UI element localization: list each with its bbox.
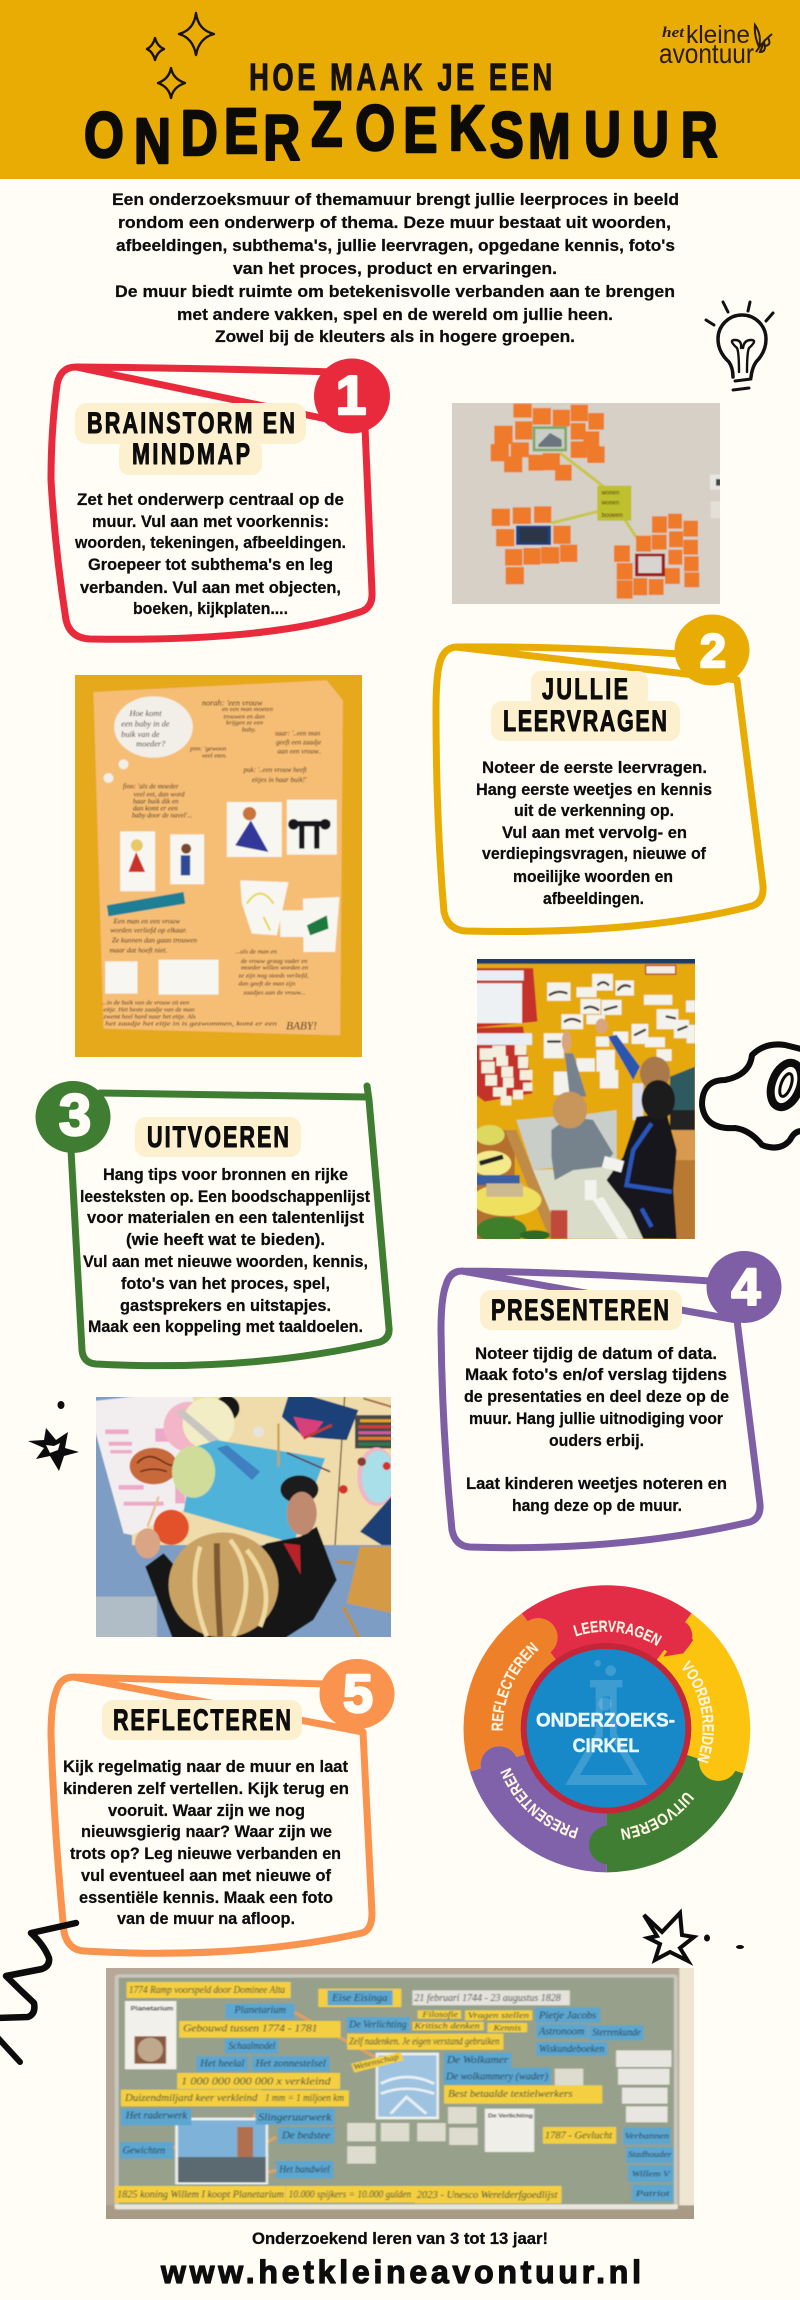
badge 2: 2: [700, 624, 726, 677]
photo: finished wall about planetarium: De wolkammery (wader): [445, 2071, 548, 2082]
photo: finished wall about planetarium: Slingeruurwerk: [258, 2112, 333, 2123]
photo: poster hoe komt een baby in de buik: moeder?: [136, 739, 166, 748]
intro text block: Zowel bij de kleuters als in hogere groepen.: [215, 327, 575, 346]
photo: poster hoe komt een baby in de buik: Hoe komt: [128, 709, 162, 718]
photo: finished wall about planetarium: Kritisch denken: [413, 2021, 480, 2030]
segment: leervragen: [522, 1585, 692, 1728]
heading pill: PRESENTEREN: [491, 1292, 669, 1327]
panel: 5 reflecteren: [51, 1659, 394, 1953]
photo: finished wall about planetarium: De Wolkamer: [446, 2055, 509, 2066]
photo: finished wall about planetarium: 1 mm = 1 miljoen km: [265, 2093, 344, 2104]
photo: finished wall about planetarium: [106, 1968, 694, 2219]
icon: light bulb: [706, 302, 773, 390]
intro text block: rondom een onderwerp of thema. Deze muur bestaat uit woorden,: [118, 213, 671, 232]
body text: essentiële kennis. Maak een foto: [79, 1888, 333, 1907]
body text: uit de verkenning op.: [514, 801, 674, 820]
photo: finished wall about planetarium: Best betaalde textielwerkers: [448, 2089, 573, 2100]
photo: mindmap on wall: bouwen: [602, 513, 623, 519]
photo: finished wall about planetarium: Patriot: [635, 2190, 670, 2199]
heading pill: LEERVRAGEN: [503, 703, 667, 738]
ring labels: LEERVRAGEN: [573, 1620, 662, 1646]
doodle: squiggle: [0, 1923, 76, 2062]
photo: finished wall about planetarium: Het bandwiel: [278, 2164, 330, 2175]
heading pill: MINDMAP: [132, 436, 250, 471]
body text: Noteer tijdig de datum of data.: [475, 1344, 717, 1363]
photo: finished wall about planetarium: 1825 koning Willem I koopt Planetarium: [117, 2189, 284, 2200]
heading: hoe maak je een: HOE MAAK JE EEN: [249, 57, 552, 99]
frame: [441, 1271, 760, 1548]
body text: woorden, tekeningen, afbeeldingen.: [74, 533, 346, 552]
heading pill: [75, 403, 306, 475]
photo: mindmap on wall: wonen: [601, 491, 619, 497]
badge 4: 4: [732, 1259, 761, 1317]
intro text block: met andere vakken, spel en de wereld om jullie heen.: [177, 305, 613, 324]
segment: uitvoeren: [606, 1728, 743, 1872]
doodle: burst star and dots: [644, 1913, 744, 1961]
photo: finished wall about planetarium: Wiskundeboeken: [539, 2044, 605, 2055]
photo: finished wall about planetarium: Planetarium: [131, 2006, 173, 2012]
body text: nieuwsgierig naar? Waar zijn we: [81, 1822, 332, 1841]
body text: Maak een koppeling met taaldoelen.: [88, 1317, 363, 1336]
body text: [464, 1344, 729, 1515]
logo: het kleine avontuur: kleine: [686, 21, 750, 49]
photo: poster hoe komt een baby in de buik: een baby in de: [121, 719, 170, 728]
photo: poster hoe komt een baby in de buik: ...als de man en: [235, 949, 278, 956]
photo: finished wall about planetarium: 21 februari 1744 - 23 augustus 1828: [414, 1993, 561, 2004]
heading pill: REFLECTEREN: [113, 1702, 291, 1737]
photo: finished wall about planetarium: 1774 Ramp voorspeld door Dominee Alta: [129, 1985, 286, 1996]
photo: poster hoe komt een baby in de buik: baby door de navel'...: [132, 812, 193, 820]
body text: verdiepingsvragen, nieuwe of: [482, 844, 706, 863]
centre label: [536, 1711, 675, 1757]
photo: poster hoe komt een baby in de buik: norah: 'een vrouw: [202, 699, 263, 708]
photo: poster hoe komt een baby in de buik: dan komt er een: [133, 804, 178, 812]
intro text block: [112, 190, 679, 346]
photo: poster hoe komt een baby in de buik: worden verliefd op elkaar.: [110, 926, 187, 935]
heading pill: BRAINSTORM EN: [87, 405, 295, 440]
body text: Kijk regelmatig naar de muur en laat: [63, 1757, 348, 1776]
segment: presenteren: [470, 1728, 607, 1872]
photo: poster hoe komt een baby in de buik: de vrouw graag vader en: [241, 958, 308, 965]
photo: finished wall about planetarium: Vragen stellen: [468, 2011, 530, 2020]
photo: finished wall about planetarium: Stadhouder: [628, 2151, 672, 2160]
body text: Noteer de eerste leervragen.: [482, 758, 707, 777]
photo: poster hoe komt een baby in de buik: moeder willen worden en: [241, 965, 309, 972]
photo: finished wall about planetarium: Verbannen: [625, 2132, 669, 2141]
badge 1: 1: [336, 364, 366, 426]
photo: poster hoe komt een baby in de buik: baby.: [242, 727, 256, 734]
badge 4: [706, 1251, 782, 1323]
photo: finished wall about planetarium: Schaalmodel: [229, 2041, 275, 2052]
photo: poster hoe komt een baby in de buik: haar buik dik en: [133, 798, 179, 806]
body text: [74, 490, 346, 618]
doodle: cloud with eye: [702, 1044, 800, 1148]
photo: poster hoe komt een baby in de buik: maar dat hoeft niet.: [110, 946, 167, 955]
body text: de presentaties en deel deze op de: [464, 1387, 729, 1406]
centre label: CIRKEL: [573, 1736, 640, 1757]
body text: moeilijke woorden en: [513, 867, 673, 886]
photo: poster hoe komt een baby in de buik: en een man moeten: [222, 706, 274, 713]
photo: poster hoe komt een baby in de buik: het zaadje het eitje in is gezwommen, komt er een: [105, 1021, 278, 1028]
photo: finished wall about planetarium: Astronoom: [538, 2026, 585, 2037]
segment: voorbereiden: [606, 1613, 750, 1773]
photo: poster hoe komt een baby in de buik: pim: 'gewoon: [189, 745, 227, 752]
badge 2: [674, 614, 750, 686]
ring labels: PRESENTEREN: [500, 1768, 578, 1839]
body text: boeken, kijkplaten....: [133, 599, 288, 618]
photo: poster hoe komt een baby in de buik: finn: 'als de moeder: [123, 783, 179, 791]
segment: reflecteren: [464, 1613, 606, 1772]
photo: finished wall about planetarium: De Verlichting: [348, 2019, 407, 2030]
panel: 1 brainstorm en mindmap: [51, 358, 390, 639]
frame: [51, 367, 372, 639]
header band: [0, 0, 800, 179]
photo: finished wall about planetarium: De bedstee: [281, 2130, 330, 2141]
photo: poster hoe komt een baby in de buik: buik van de: [121, 730, 160, 739]
badge 3: 3: [59, 1083, 91, 1148]
body text: Laat kinderen weetjes noteren en: [466, 1474, 727, 1493]
photo: mindmap on wall: wonen: [601, 501, 619, 507]
body text: verbanden. Vul aan met objecten,: [80, 578, 341, 597]
body text: muur. Vul aan met voorkennis:: [92, 512, 329, 531]
body text: Zet het onderwerp centraal op de: [77, 490, 344, 509]
photo: poster hoe komt een baby in de buik: eitjes in haar buik!': [252, 776, 307, 784]
panel: 2 jullie leervragen: [436, 614, 763, 931]
body text: Vul aan met vervolg- en: [502, 823, 687, 842]
body text: hang deze op de muur.: [512, 1496, 682, 1515]
photo: poster hoe komt een baby in de buik: [75, 675, 362, 1057]
photo: finished wall about planetarium: Pietje Jacobs: [538, 2010, 596, 2021]
photo: finished wall about planetarium: De Verlichting: [488, 2113, 533, 2119]
drawings: [235, 820, 268, 852]
photo: finished wall about planetarium: 2023 - Unesco Werelderfgoedlijst: [417, 2190, 558, 2201]
photo: finished wall about planetarium: 10.000 spijkers = 10.000 gulden: [289, 2189, 412, 2200]
photo: poster hoe komt een baby in de buik: saar: '..een man: [275, 729, 321, 737]
body text: trots op? Leg nieuwe verbanden en: [70, 1844, 341, 1863]
heading pill: JULLIE: [542, 671, 628, 706]
logo: het kleine avontuur: [659, 21, 772, 69]
ring labels: VOORBEREIDEN: [682, 1660, 714, 1764]
caption: Onderzoekend leren van 3 tot 13 jaar!: [252, 2230, 548, 2248]
photo: finished wall about planetarium: Eise Eisinga: [331, 1993, 388, 2004]
body text: (wie heeft wat te bieden).: [126, 1230, 325, 1249]
body text: voor materialen en een talentenlijst: [87, 1208, 364, 1227]
photo: finished wall about planetarium: Planetarium: [234, 2005, 286, 2016]
photo: poster hoe komt een baby in de buik: veel eten.: [202, 753, 227, 760]
photo: finished wall about planetarium: Het zonnestelsel: [254, 2058, 326, 2069]
centre label: ONDERZOEKS-: [536, 1711, 675, 1732]
body text: Groepeer tot subthema's en leg: [88, 555, 333, 574]
photo: poster hoe komt een baby in de buik: aan een vrouw..: [278, 748, 322, 756]
ring labels: [492, 1620, 714, 1840]
intro text block: afbeeldingen, subthema's, jullie leervragen, opgedane kennis, foto's: [116, 236, 675, 255]
photo: finished wall about planetarium: Filosofie: [421, 2010, 458, 2019]
photo: children at leervragen wall: [477, 959, 695, 1239]
website url: www.hetkleineavontuur.nl: [160, 2254, 641, 2290]
photo: finished wall about planetarium: Het heelal: [199, 2058, 244, 2069]
body text: afbeeldingen.: [543, 889, 644, 908]
ring labels: UITVOEREN: [620, 1792, 694, 1840]
logo: het kleine avontuur: avontuur: [659, 38, 754, 69]
photo: poster hoe komt een baby in de buik: zwemt heel hard naar het eitje. Als: [103, 1013, 196, 1020]
photo: child working at table with brain sheet: [96, 1397, 391, 1637]
photo: poster hoe komt een baby in de buik: ze zijn nog steeds verliefd,: [238, 973, 309, 980]
badge 3: [36, 1081, 110, 1153]
photo: finished wall about planetarium: Duizendmiljard keer verkleind: [124, 2093, 258, 2104]
photo: finished wall about planetarium: Gewichten: [123, 2145, 166, 2156]
body text: vul eventueel aan met nieuwe of: [81, 1866, 331, 1885]
body text: leesteksten op. Een boodschappenlijst: [80, 1187, 370, 1206]
photo: poster hoe komt een baby in de buik: BABY!: [286, 1021, 317, 1033]
body text: muur. Hang jullie uitnodiging voor: [469, 1409, 723, 1428]
photo: finished wall about planetarium: Willem V: [632, 2170, 671, 2179]
intro text block: Een onderzoeksmuur of themamuur brengt jullie leerproces in beeld: [112, 190, 679, 209]
photo: poster hoe komt een baby in de buik: trouwen en dan: [224, 713, 265, 720]
photo: poster hoe komt een baby in de buik: geeft een zaadje: [276, 738, 321, 746]
photo: poster hoe komt een baby in de buik: eitje. Het beste zaadje van de man: [104, 1007, 195, 1014]
frame: [51, 1677, 372, 1953]
body text: van de muur na afloop.: [117, 1909, 295, 1928]
body text: gastsprekers en uitstapjes.: [120, 1296, 331, 1315]
photo: poster hoe komt een baby in de buik: ...in de buik van de vrouw zit een: [102, 1000, 190, 1007]
photo: poster hoe komt een baby in de buik: Een man en een vrouw: [112, 917, 180, 926]
inner red ring: [521, 1643, 691, 1814]
photo: finished wall about planetarium: Het raderwerk: [125, 2110, 188, 2121]
body text: Hang eerste weetjes en kennis: [476, 780, 712, 799]
frame: [436, 647, 763, 931]
body text: Hang tips voor bronnen en rijke: [103, 1165, 348, 1184]
photo: poster hoe komt een baby in de buik: dan geeft de man zijn: [238, 980, 296, 987]
logo: het kleine avontuur: het: [662, 25, 685, 41]
icon: flask: [565, 1660, 647, 1785]
panel: 3 uitvoeren: [36, 1081, 389, 1366]
body text: [476, 758, 712, 908]
photo: finished wall about planetarium: 1787 - Gevlucht: [545, 2130, 613, 2141]
body text: foto's van het proces, spel,: [121, 1274, 330, 1293]
heading pill: UITVOEREN: [147, 1119, 289, 1154]
badge 5: [320, 1659, 394, 1729]
intro text block: van het proces, product en ervaringen.: [233, 259, 557, 278]
photo: finished wall about planetarium: Sterrenkunde: [592, 2027, 641, 2038]
frame: [71, 1086, 389, 1366]
centre disc: [527, 1649, 685, 1808]
body text: vooruit. Waar zijn we nog: [108, 1801, 305, 1820]
photo: finished wall about planetarium: Wetenschap: [352, 2052, 400, 2071]
photo: poster hoe komt een baby in de buik: zaadjes aan de vrouw...: [242, 989, 306, 996]
photo: poster hoe komt een baby in de buik: krijgen ze een: [226, 720, 264, 727]
ring labels: REFLECTEREN: [492, 1642, 539, 1730]
body text: Maak foto's en/of verslag tijdens: [465, 1365, 727, 1384]
photo: finished wall about planetarium: Kennis: [492, 2023, 522, 2032]
panel: 4 presenteren: [441, 1251, 782, 1548]
body text: ouders erbij.: [549, 1431, 644, 1450]
photo: poster hoe komt een baby in de buik: veel eet, dan word: [134, 790, 185, 798]
badge 5: 5: [343, 1664, 373, 1724]
photo: finished wall about planetarium: 1 000 000 000 000 x verkleind: [181, 2076, 331, 2087]
doodle: small star and dot: [28, 1401, 79, 1471]
photo: mindmap on wall: [452, 403, 720, 604]
chart: onderzoekscirkel: [464, 1585, 750, 1872]
body text: Vul aan met nieuwe woorden, kennis,: [83, 1252, 368, 1271]
icon: sparkles: [147, 13, 214, 98]
body text: kinderen zelf vertellen. Kijk terug en: [63, 1779, 349, 1798]
photo: finished wall about planetarium: Gebouwd tussen 1774 - 1781: [183, 2023, 318, 2034]
puzzle knobs: [481, 1618, 738, 1864]
badge 1: [314, 358, 390, 434]
heading pill: [491, 671, 680, 741]
photo: poster hoe komt een baby in de buik: Ze kunnen dan gaan trouwen: [112, 935, 197, 944]
body text: [80, 1165, 370, 1336]
photo: poster hoe komt een baby in de buik: puk: '..een vrouw heeft: [242, 766, 308, 774]
intro text block: De muur biedt ruimte om betekenisvolle verbanden aan te brengen: [115, 282, 675, 301]
title: onderzoeksmuur: ONDERZOEKSMUUR: [84, 90, 718, 177]
body text: [63, 1757, 349, 1928]
photo: finished wall about planetarium: Zelf nadenken. Je eigen verstand gebruiken: [349, 2036, 500, 2047]
